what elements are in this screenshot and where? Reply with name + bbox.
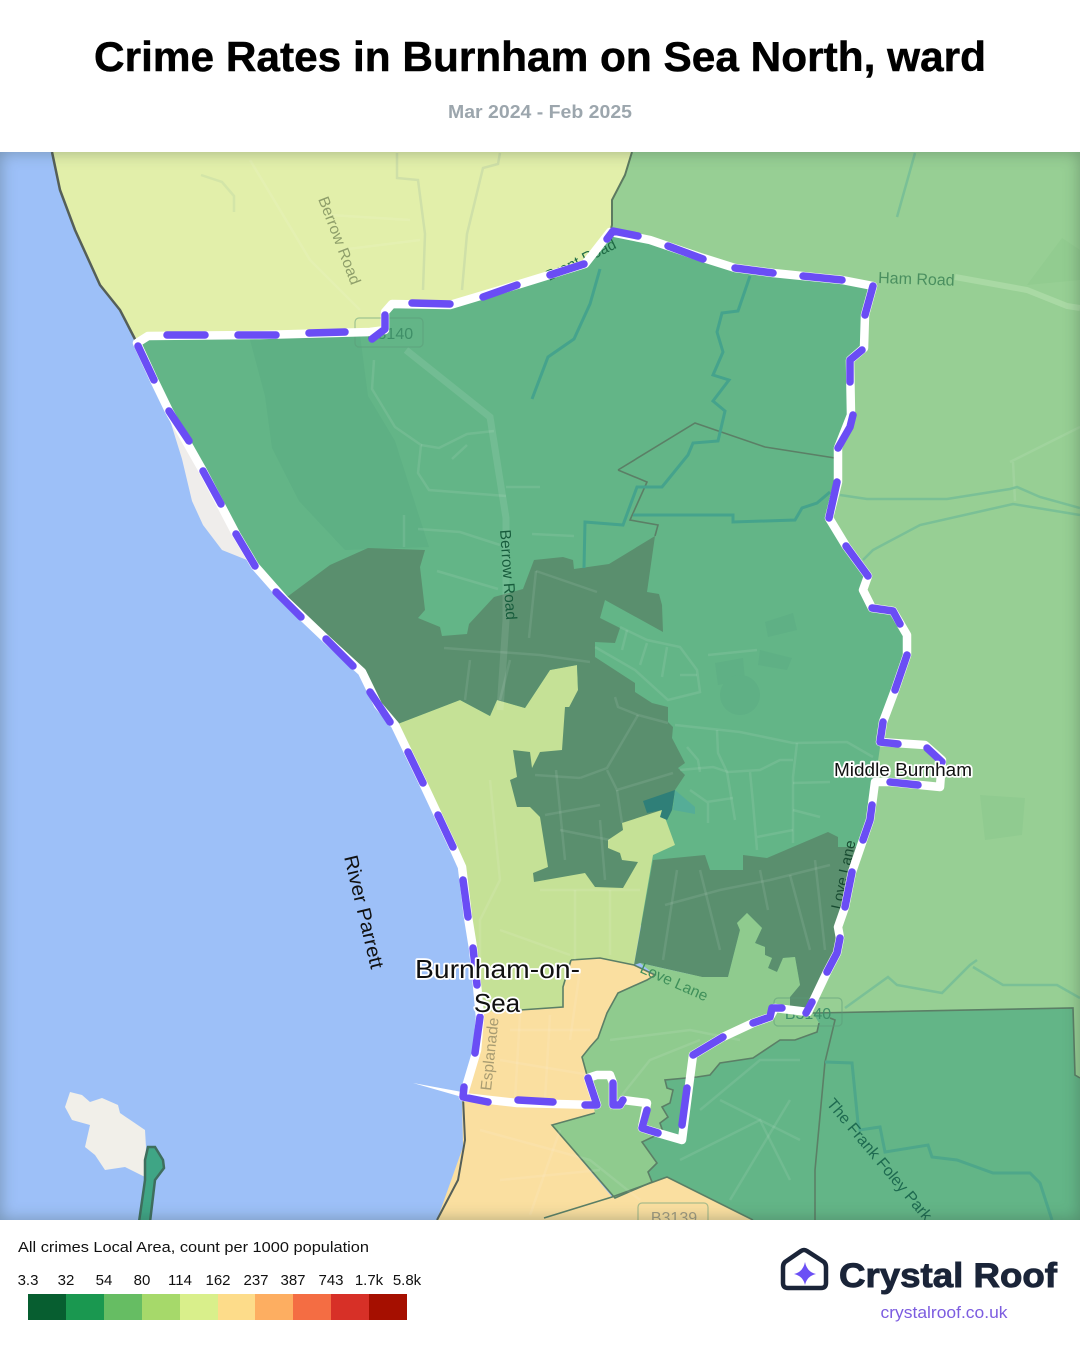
area: town centre orange <box>437 958 753 1220</box>
coastline north-east edge <box>610 152 632 232</box>
legend <box>18 1239 422 1320</box>
road label B3140 north: B3140 <box>367 326 413 343</box>
coastline <box>52 152 137 343</box>
south coastline <box>437 1097 465 1220</box>
subtitle: date range: Mar 2024 - Feb 2025 <box>448 101 632 122</box>
legend values: 5.8k <box>393 1272 422 1289</box>
icon: house with star <box>783 1250 826 1288</box>
island: sandbank <box>65 1092 146 1177</box>
legend values: 1.7k <box>355 1272 384 1289</box>
road label Berrow Road north: Berrow Road <box>314 194 363 287</box>
road label Brent Road: Brent Road <box>543 236 619 285</box>
area borders <box>520 423 1080 1220</box>
water label River Parrett: River Parrett <box>339 853 388 972</box>
road label B3140 south: B3140 <box>785 1006 831 1023</box>
wordmark: Crystal Roof <box>839 1257 1058 1295</box>
boundary purple dashes <box>138 231 942 1133</box>
road label Frank Foley Park: The Frank Foley Park <box>823 1096 935 1225</box>
legend colour scale <box>28 1294 407 1320</box>
pier <box>414 1083 460 1096</box>
legend values: 162 <box>205 1272 231 1289</box>
sea <box>0 152 692 1220</box>
logo <box>783 1250 1058 1322</box>
road: Ham Road <box>955 277 1080 308</box>
field patch north-east <box>1027 238 1080 285</box>
road badges <box>355 318 842 1233</box>
streams <box>532 269 1052 1220</box>
legend values: 54 <box>96 1272 112 1289</box>
legend values: 387 <box>280 1272 306 1289</box>
main road <box>406 350 506 710</box>
legend title: All crimes Local Area, count per 1000 population <box>18 1239 369 1256</box>
legend values: 237 <box>243 1272 269 1289</box>
area: ward low-crime green <box>142 237 903 997</box>
logo url: crystalroof.co.uk <box>880 1304 1008 1322</box>
local streets <box>371 360 1076 1200</box>
legend values: 743 <box>318 1272 344 1289</box>
legend values: 114 <box>168 1272 192 1289</box>
area: darker band inside ward <box>249 335 429 550</box>
map edge shadow <box>0 152 1080 1220</box>
place label Burnham-on-Sea: Sea <box>474 988 521 1018</box>
area: mid-ward light green <box>395 665 675 1017</box>
field patch east <box>980 795 1025 840</box>
legend values: 32 <box>58 1272 74 1289</box>
area: dark cluster south <box>634 832 857 1012</box>
area: dark cluster north <box>287 536 668 725</box>
building patches <box>715 613 797 715</box>
farmland streams <box>201 153 1080 1008</box>
area: small teal patch dark <box>643 790 675 820</box>
island: green strip <box>139 1147 164 1222</box>
road label B3139: B3139 <box>651 1210 697 1227</box>
road label Esplanade: Esplanade <box>478 1017 503 1091</box>
area: beach <box>170 422 246 560</box>
legend values: 80 <box>134 1272 150 1289</box>
legend values: 3.3 <box>18 1272 38 1289</box>
area: eastern farmland green <box>612 152 1080 1077</box>
road label Berrow Road: Berrow Road <box>496 529 519 621</box>
road label Ham Road: Ham Road <box>878 270 955 290</box>
ward boundary <box>137 231 942 1140</box>
area: south-east green <box>642 1008 1080 1220</box>
area: southern medium green <box>552 913 819 1198</box>
title: Crime Rates in Burnham on Sea North, ward <box>94 33 986 80</box>
road label Love Lane south: Love Lane <box>637 960 710 1005</box>
road label Love Lane east: Love Lane <box>828 839 859 911</box>
area: small teal patch light <box>673 790 695 814</box>
legend values <box>18 1272 422 1289</box>
area: northern pale yellow-green <box>52 152 632 343</box>
place label Middle Burnham: Middle Burnham <box>834 760 972 780</box>
area: dark cluster central <box>510 707 685 888</box>
place label Burnham-on-Sea <box>415 954 580 1018</box>
boundary white casing <box>137 232 942 1140</box>
place label Burnham-on-Sea: Burnham-on- <box>415 954 580 984</box>
